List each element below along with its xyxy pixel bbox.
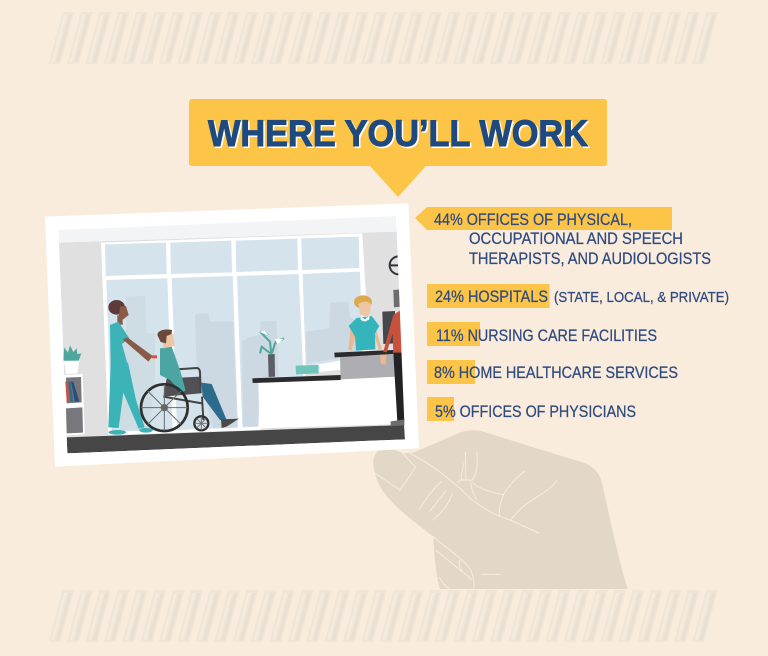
bottom stripe band xyxy=(48,590,718,642)
ceiling xyxy=(58,216,397,243)
item: 11% nursing care facilities xyxy=(427,322,657,346)
wall xyxy=(59,232,405,438)
clock xyxy=(388,255,398,276)
city skyline xyxy=(115,296,363,430)
item: 24% hospitals: 24% HOSPITALS xyxy=(435,288,548,306)
item: 24% hospitals: (STATE, LOCAL, & PRIVATE) xyxy=(554,290,729,306)
nurse pushing wheelchair xyxy=(108,300,157,435)
top stripe band xyxy=(48,12,718,64)
monitor xyxy=(382,311,395,344)
item: 5% offices of physicians xyxy=(427,397,636,421)
patient in wheelchair xyxy=(141,329,239,431)
photo of reception area xyxy=(45,203,419,467)
item: 44% offices of therapists: OCCUPATIONAL AND SPEECH xyxy=(469,230,683,248)
window xyxy=(101,233,370,435)
floor xyxy=(67,425,405,453)
photo white border xyxy=(45,203,419,467)
hand holding photo xyxy=(373,430,628,589)
bookshelf with plant xyxy=(63,345,85,435)
item: 24% hospitals xyxy=(427,284,729,308)
item: 8% home healthcare services: 8% HOME HEALTHCARE SERVICES xyxy=(434,364,678,382)
man at desk xyxy=(380,289,405,425)
list: workplaces by share xyxy=(415,207,729,421)
callout: title banner xyxy=(189,99,607,197)
item: 44% offices of therapists: 44% OFFICES OF PHYSICAL, xyxy=(434,211,632,229)
title: WHERE YOU’LL WORK xyxy=(208,113,588,154)
item: 44% offices of therapists xyxy=(415,207,711,268)
receptionist xyxy=(348,295,382,351)
item: 5% offices of physicians: 5% OFFICES OF PHYSICIANS xyxy=(435,403,636,421)
callout: title banner: WHERE YOU’LL WORK xyxy=(210,114,590,156)
item: 8% home healthcare services xyxy=(427,360,678,384)
reception desk xyxy=(252,331,403,428)
item: 44% offices of therapists: THERAPISTS, AND AUDIOLOGISTS xyxy=(469,250,711,268)
item: 11% nursing care facilities: 11% NURSING CARE FACILITIES xyxy=(436,327,657,345)
